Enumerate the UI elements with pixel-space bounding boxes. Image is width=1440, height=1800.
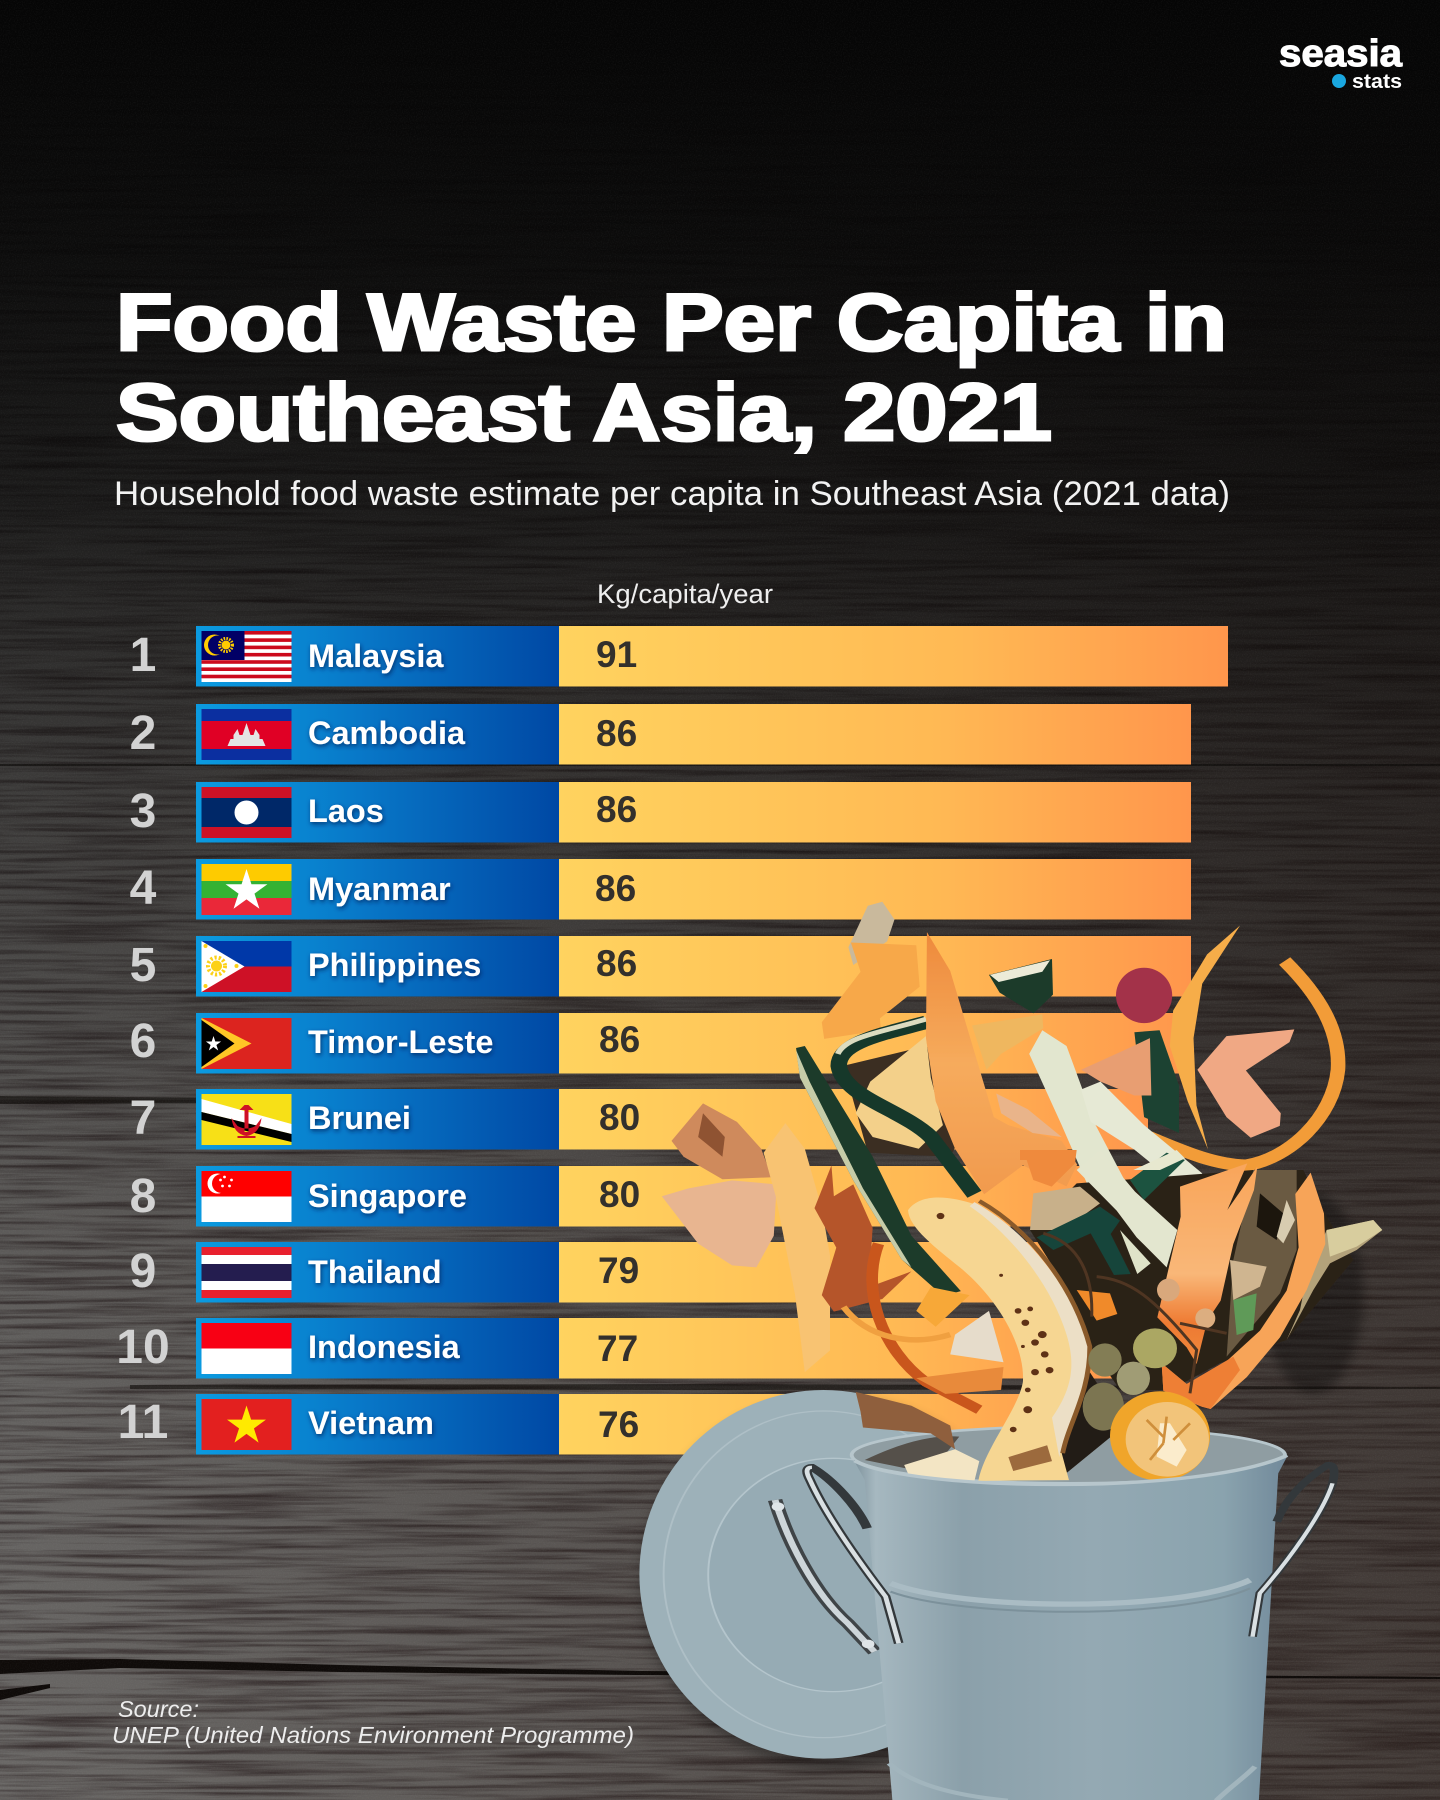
- country names: Philippines: [308, 947, 481, 983]
- red-brown leafy skin: [814, 1165, 911, 1312]
- banana: [908, 1197, 1088, 1481]
- green strips: [1037, 1207, 1131, 1275]
- subtitle: Household food waste estimate per capita in Southeast Asia (2021 data): [114, 475, 1230, 513]
- top garlic skin: [848, 902, 894, 965]
- country names: Timor-Leste: [308, 1024, 493, 1060]
- logo: seasia stats: stats: [1352, 71, 1402, 93]
- values: 76: [598, 1404, 639, 1445]
- left cucumber strip: [796, 1046, 961, 1296]
- white zucchini: [1029, 1030, 1178, 1268]
- country names: Vietnam: [308, 1405, 434, 1441]
- flag: Singapore: [202, 1171, 292, 1222]
- title: Food Waste Per Capita in: [116, 278, 1227, 368]
- rank numbers: 10: [116, 1321, 170, 1374]
- food bin body and handles: [807, 1455, 1334, 1800]
- center onion skin: [1081, 1038, 1151, 1095]
- food scraps: loops and scraps beside banana: [844, 1197, 1125, 1481]
- big orange loop: [1149, 961, 1338, 1165]
- rank numbers: 6: [130, 1015, 156, 1068]
- yellow strip: [764, 1123, 830, 1372]
- rank numbers: 4: [130, 862, 157, 915]
- values: 86: [595, 868, 636, 909]
- food scraps: upper and left pieces: [662, 902, 1338, 1372]
- values: 79: [598, 1250, 639, 1291]
- rank numbers: 7: [130, 1092, 156, 1145]
- curved cucumber: [839, 1022, 974, 1194]
- flag: Cambodia: [202, 709, 292, 760]
- title: [116, 278, 1227, 458]
- values: 86: [596, 943, 637, 984]
- orange chunk: [1077, 1290, 1117, 1321]
- country names: Singapore: [308, 1178, 467, 1214]
- country names: Indonesia: [308, 1329, 461, 1365]
- flag: Brunei: [202, 1094, 292, 1145]
- values: 80: [599, 1097, 640, 1138]
- food bin lid and interior: [639, 1390, 1285, 1770]
- flag: Timor-Leste: [202, 1018, 292, 1069]
- orange peel chunk: [822, 942, 920, 1039]
- flag: Myanmar: [202, 864, 292, 915]
- cucumber slice: [989, 959, 1053, 1013]
- country names: Brunei: [308, 1100, 411, 1136]
- values: 86: [596, 713, 637, 754]
- values: 80: [599, 1174, 640, 1215]
- flag: Indonesia: [202, 1323, 292, 1374]
- beige centre scraps: [1030, 1187, 1100, 1230]
- left onion: [672, 1103, 772, 1179]
- logo: seasia stats: seasia: [1279, 33, 1403, 75]
- country names: [308, 638, 493, 1441]
- value bars: [559, 626, 1228, 1454]
- pale far-right scrap: [1287, 1220, 1382, 1340]
- rank numbers: 1: [130, 629, 156, 682]
- rank numbers: 11: [118, 1396, 168, 1449]
- values: 86: [596, 789, 637, 830]
- pale squash peels: [856, 1036, 943, 1149]
- red fruit: [1116, 968, 1172, 1023]
- rank numbers: 3: [130, 785, 156, 838]
- flag: Thailand: [202, 1247, 292, 1298]
- values: 91: [596, 634, 637, 675]
- rank numbers: 5: [130, 939, 156, 992]
- rank numbers: 8: [130, 1170, 156, 1223]
- country names: Thailand: [308, 1254, 442, 1290]
- country names: Cambodia: [308, 715, 466, 751]
- right cucumber: [1134, 1030, 1179, 1133]
- country names: Malaysia: [308, 638, 444, 674]
- large orange peel: [1157, 1163, 1257, 1364]
- values: [595, 634, 640, 1445]
- logo: seasia stats: [1279, 33, 1403, 93]
- country names: Myanmar: [308, 871, 451, 907]
- values: 77: [597, 1328, 638, 1369]
- blue label bars: [196, 626, 559, 1454]
- long right peel: [1162, 1173, 1325, 1409]
- flag: Malaysia: [202, 631, 292, 682]
- long orange peel: [926, 932, 1077, 1194]
- flag: Vietnam: [202, 1399, 292, 1450]
- right onion skin: [1197, 1029, 1294, 1138]
- title: Southeast Asia, 2021: [116, 368, 1052, 458]
- source note: Source:: [118, 1696, 199, 1722]
- rank numbers: 2: [130, 707, 156, 760]
- food scraps: right side peels and vegetables: [1020, 1150, 1382, 1409]
- food scraps: grapes, twigs and squeezed lemon: [1043, 1233, 1227, 1481]
- rank numbers: 9: [130, 1245, 156, 1298]
- country names: Laos: [308, 793, 384, 829]
- rank numbers: [116, 629, 170, 1449]
- source note: UNEP (United Nations Environment Programme): [112, 1722, 634, 1748]
- flag: Laos: [202, 787, 292, 838]
- flag: Philippines: [202, 941, 292, 992]
- axis label: Kg/capita/year: [597, 579, 773, 609]
- tall orange peel: [1170, 925, 1240, 1150]
- values: 86: [599, 1019, 640, 1060]
- source note: [112, 1696, 634, 1748]
